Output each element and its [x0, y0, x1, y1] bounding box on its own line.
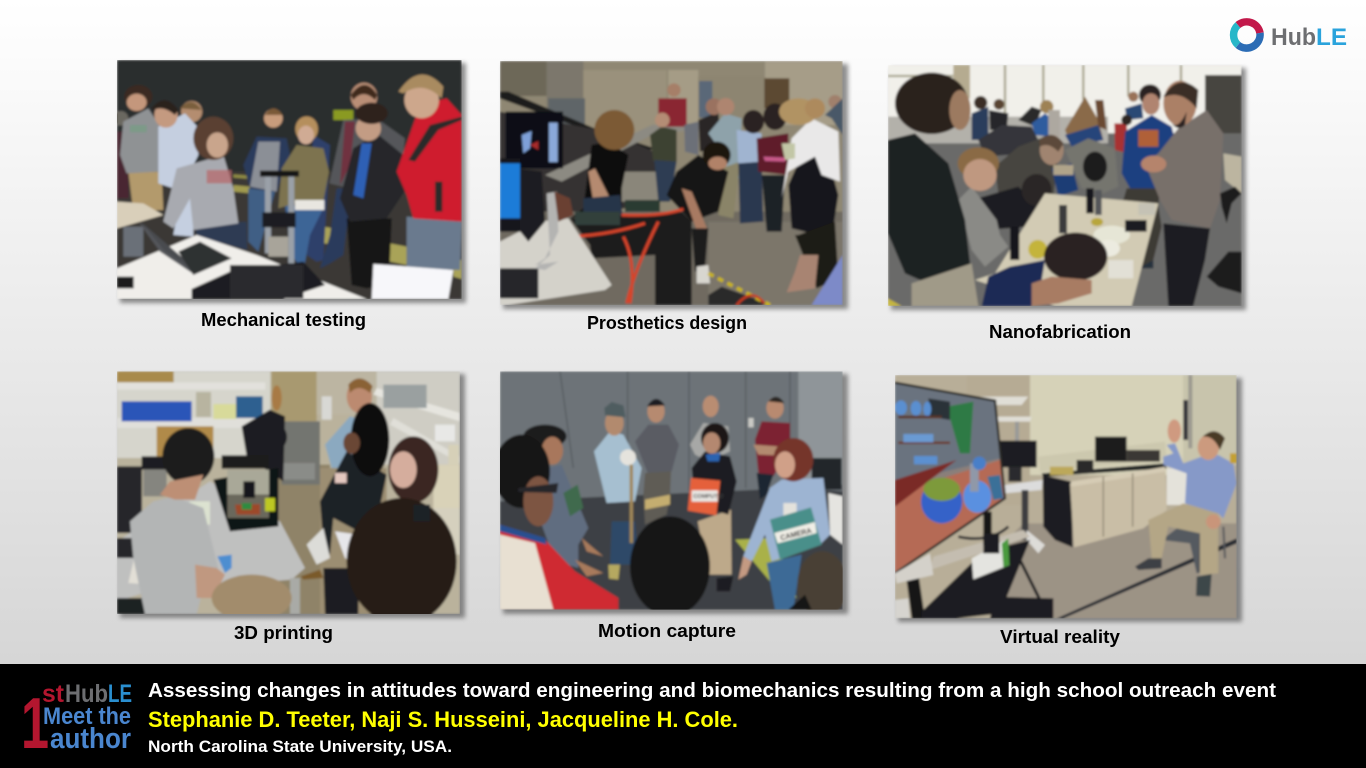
photo: motion capture [493, 371, 847, 618]
panel: mechanical testing [114, 60, 466, 330]
panel: nanofabrication [888, 65, 1246, 342]
photo: 3D printing [117, 371, 460, 625]
photo: nanofabrication [888, 65, 1242, 306]
caption: Nanofabrication: Nanofabrication [989, 322, 1131, 342]
photo: mechanical testing [114, 60, 462, 299]
logo: HubLE: Hub [1271, 24, 1316, 51]
photo: motion capture: COMPUTE! [693, 494, 724, 500]
logo: 1st HubLE Meet the author [21, 680, 132, 764]
caption: Motion capture: Motion capture [598, 621, 736, 641]
caption: 3D printing: 3D printing [234, 623, 333, 643]
caption: Mechanical testing: Mechanical testing [201, 310, 366, 330]
logo: 1st HubLE Meet the author: Hub [65, 680, 108, 708]
photo: motion capture: CAMERA [779, 526, 813, 542]
caption: Prosthetics design: Prosthetics design [587, 313, 747, 333]
photo: prosthetics design [500, 61, 843, 305]
authors: Stephanie D. Teeter, Naji S. Husseini, Jacqueline H. Cole. [148, 707, 738, 732]
logo: HubLE: LE [1316, 24, 1347, 51]
logo: 1st HubLE Meet the author: Meet the [43, 703, 131, 730]
panel: prosthetics design [500, 61, 848, 333]
logo: 1st HubLE Meet the author: author [50, 723, 131, 755]
affiliation: North Carolina State University, USA. [148, 737, 452, 756]
title: study title: Assessing changes in attitudes toward engineering and biomechanics resulting from a high school outreach event [148, 680, 1276, 702]
logo: 1st HubLE Meet the author: 1 [21, 684, 49, 764]
photo: virtual reality [895, 375, 1237, 618]
logo: 1st HubLE Meet the author: LE [108, 680, 132, 708]
panel: motion capture [493, 371, 848, 641]
caption: Virtual reality: Virtual reality [1000, 627, 1120, 647]
footer band [0, 664, 1366, 768]
logo: 1st HubLE Meet the author: st [42, 680, 65, 708]
logo: HubLE [1234, 22, 1347, 51]
panel: virtual reality [895, 375, 1242, 647]
panel: 3D printing [117, 371, 465, 643]
